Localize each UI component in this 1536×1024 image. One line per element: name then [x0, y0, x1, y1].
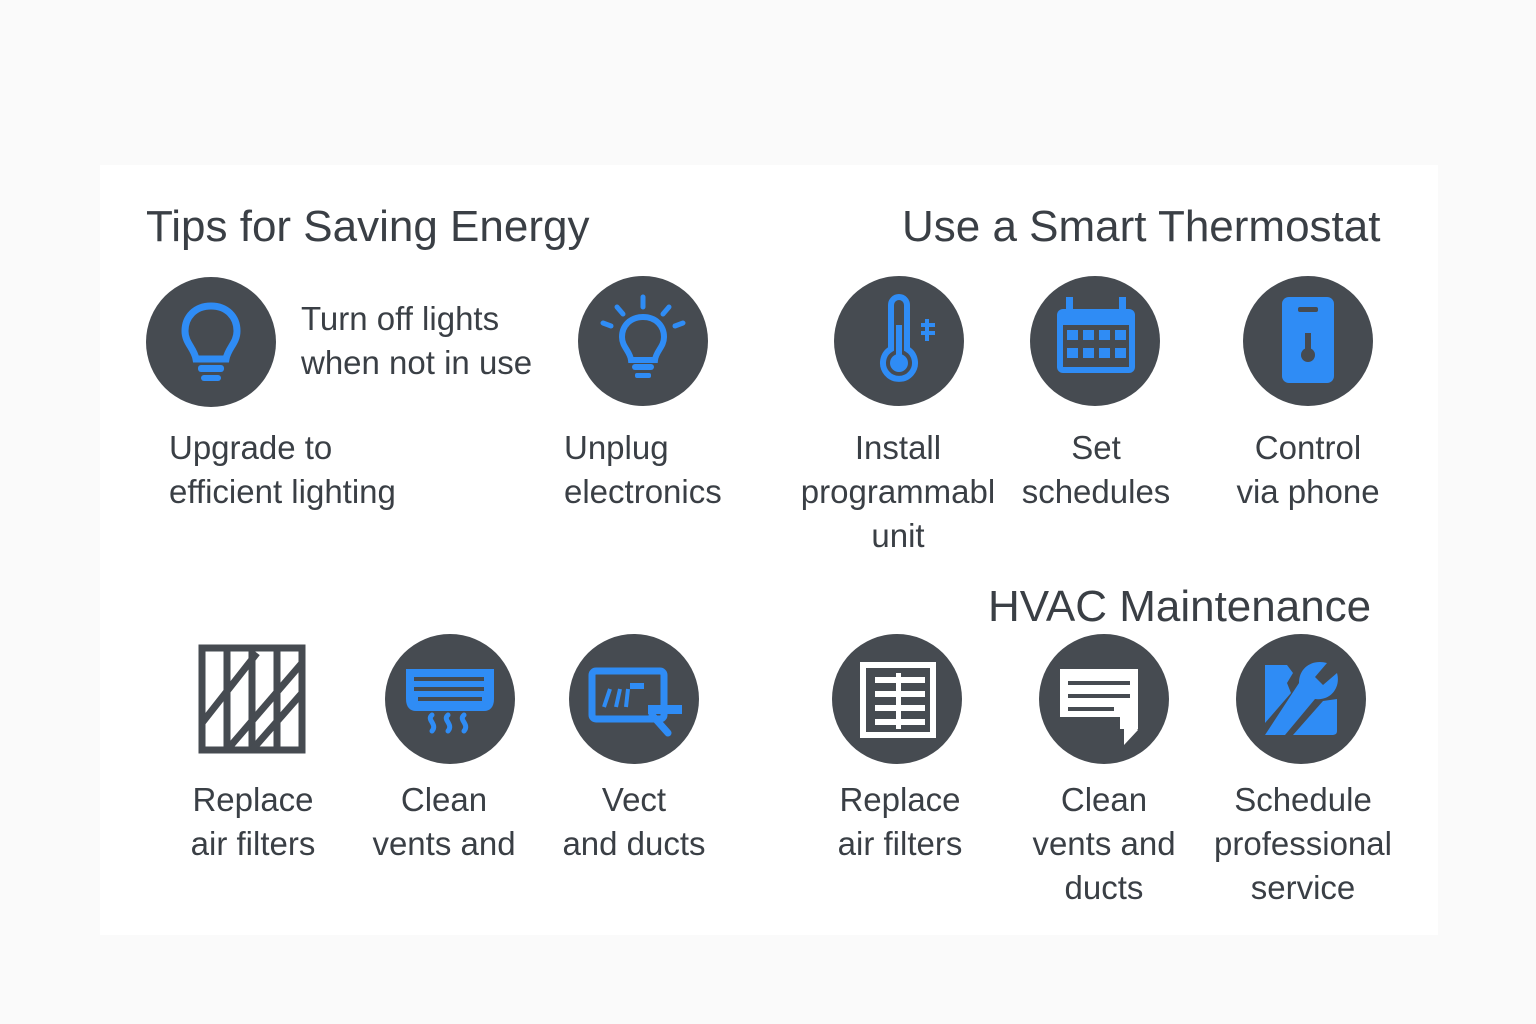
label: turn off lights: when not in use [301, 344, 532, 381]
label: control via phone [1236, 429, 1380, 510]
icon: thermometer [834, 276, 964, 406]
label: clean vents and ducts: vents and [1032, 825, 1176, 862]
label: install: Install [855, 429, 941, 466]
label: set schedules: schedules [1022, 473, 1170, 510]
title: HVAC Maintenance: HVAC Maintenance [988, 582, 1371, 631]
label: upgrade [169, 429, 396, 510]
icon: bulb [146, 277, 276, 407]
icon: air conditioner [385, 634, 515, 764]
icon: phone thermostat [1243, 276, 1373, 406]
icon: vent inspect [569, 634, 699, 764]
label: turn off lights: Turn off lights [301, 300, 499, 337]
label: unplug [564, 429, 722, 510]
label: turn off lights [301, 300, 532, 381]
label: clean vents: vents and [372, 825, 516, 862]
label: replace air filters 2: air filters [838, 825, 962, 862]
label: clean vents: Clean [401, 781, 487, 818]
title: Tips for Saving Energy: Tips for Saving Energy [146, 202, 589, 251]
label: replace air filters 2: Replace [839, 781, 961, 818]
title: Use a Smart Thermostat: Use a Smart Thermostat [902, 202, 1380, 251]
label: control via phone: via phone [1236, 473, 1380, 510]
label: vect ducts: Vect [602, 781, 666, 818]
icon: wrench [1236, 634, 1366, 764]
label: schedule service: Schedule [1234, 781, 1372, 818]
label: control via phone: Control [1255, 429, 1361, 466]
icon: filter grid [198, 644, 306, 754]
label: unplug: Unplug [564, 429, 669, 466]
label: install: unit [871, 517, 925, 554]
icon: document [1039, 634, 1169, 764]
label: replace air filters: Replace [192, 781, 314, 818]
label: clean vents and ducts [1032, 781, 1176, 906]
label: replace air filters 2 [838, 781, 962, 862]
label: vect ducts [562, 781, 706, 862]
label: schedule service: service [1251, 869, 1355, 906]
label: unplug: electronics [564, 473, 722, 510]
label: schedule service [1214, 781, 1392, 906]
label: clean vents and ducts: ducts [1065, 869, 1143, 906]
icon: bulb rays [578, 276, 708, 406]
label: upgrade: Upgrade to [169, 429, 332, 466]
label: install: programmabl [801, 473, 995, 510]
label: set schedules: Set [1071, 429, 1121, 466]
icon: calendar [1030, 276, 1160, 406]
label: clean vents [372, 781, 516, 862]
label: clean vents and ducts: Clean [1061, 781, 1147, 818]
label: upgrade: efficient lighting [169, 473, 396, 510]
label: install [801, 429, 995, 554]
label: set schedules [1022, 429, 1170, 510]
label: vect ducts: and ducts [562, 825, 706, 862]
icon: filter panel [832, 634, 962, 764]
label: replace air filters: air filters [191, 825, 315, 862]
label: schedule service: professional [1214, 825, 1392, 862]
label: replace air filters [191, 781, 315, 862]
